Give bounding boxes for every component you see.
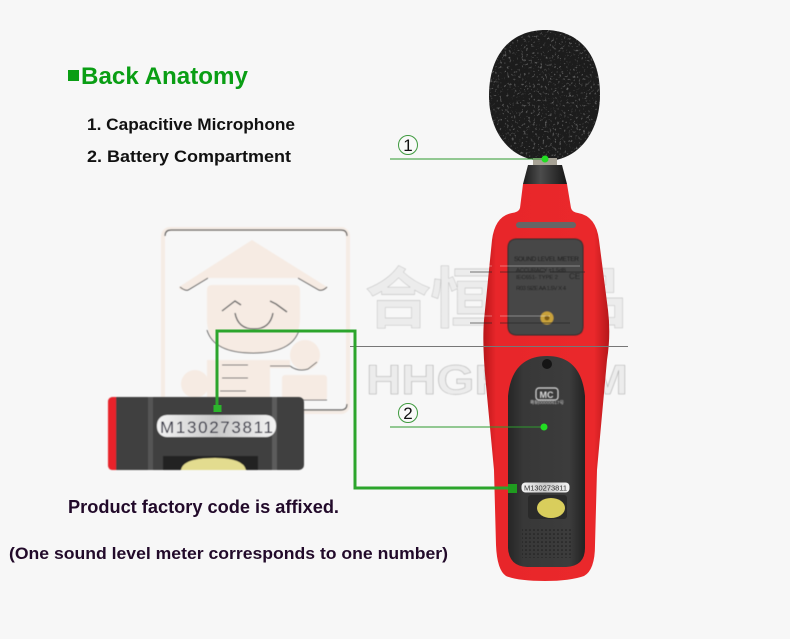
- CMC mark: MC: [540, 390, 554, 400]
- battery compartment plate: SOUND LEVEL METER: [514, 256, 579, 263]
- watermark logo: [163, 229, 348, 412]
- meter body: [483, 184, 609, 581]
- callout 2: [390, 404, 548, 430]
- watermark lines over meter: [470, 266, 585, 323]
- lower back cover: [508, 356, 585, 567]
- sound level meter: [483, 30, 609, 581]
- green connector bracket: [214, 331, 517, 493]
- QC seal: [528, 495, 567, 519]
- parts list: 1. Capacitive Microphone: [87, 115, 295, 134]
- battery compartment plate: [508, 239, 583, 335]
- factory code note: Product factory code is affixed.: [68, 497, 339, 517]
- body grip bar: [516, 222, 576, 228]
- inset: serial number closeup: M130273811: [160, 418, 273, 437]
- watermark chinese name: 合恒工品: [365, 246, 627, 342]
- callout 1: 1: [403, 136, 413, 155]
- inset: serial number closeup: [108, 397, 304, 470]
- foam windscreen: [489, 30, 600, 161]
- battery compartment plate: CE: [569, 272, 580, 281]
- number note: (One sound level meter corresponds to one number): [9, 544, 448, 563]
- speaker grille: [522, 527, 573, 558]
- title: Back Anatomy: [81, 63, 249, 90]
- parts list: [87, 115, 295, 166]
- battery compartment plate: ACCURACY ±1.5dB: [516, 268, 566, 274]
- CMC mark: 粤制00000617号: [530, 399, 564, 406]
- microphone collar: [523, 158, 567, 184]
- callout 2: 2: [403, 404, 413, 423]
- callout 1: [390, 136, 548, 162]
- watermark divider: [350, 346, 628, 347]
- battery compartment plate: R03 SIZE AA 1.5V X 4: [516, 286, 567, 292]
- battery compartment plate: IEC651- TYPE 2: [516, 275, 558, 281]
- cover hole: [542, 359, 552, 369]
- CMC mark: [530, 388, 564, 406]
- serial label on meter: M130273811: [524, 484, 567, 492]
- watermark url: HHGP.COM: [366, 356, 628, 403]
- watermark text: [365, 246, 628, 403]
- parts list: 2. Battery Compartment: [87, 147, 291, 166]
